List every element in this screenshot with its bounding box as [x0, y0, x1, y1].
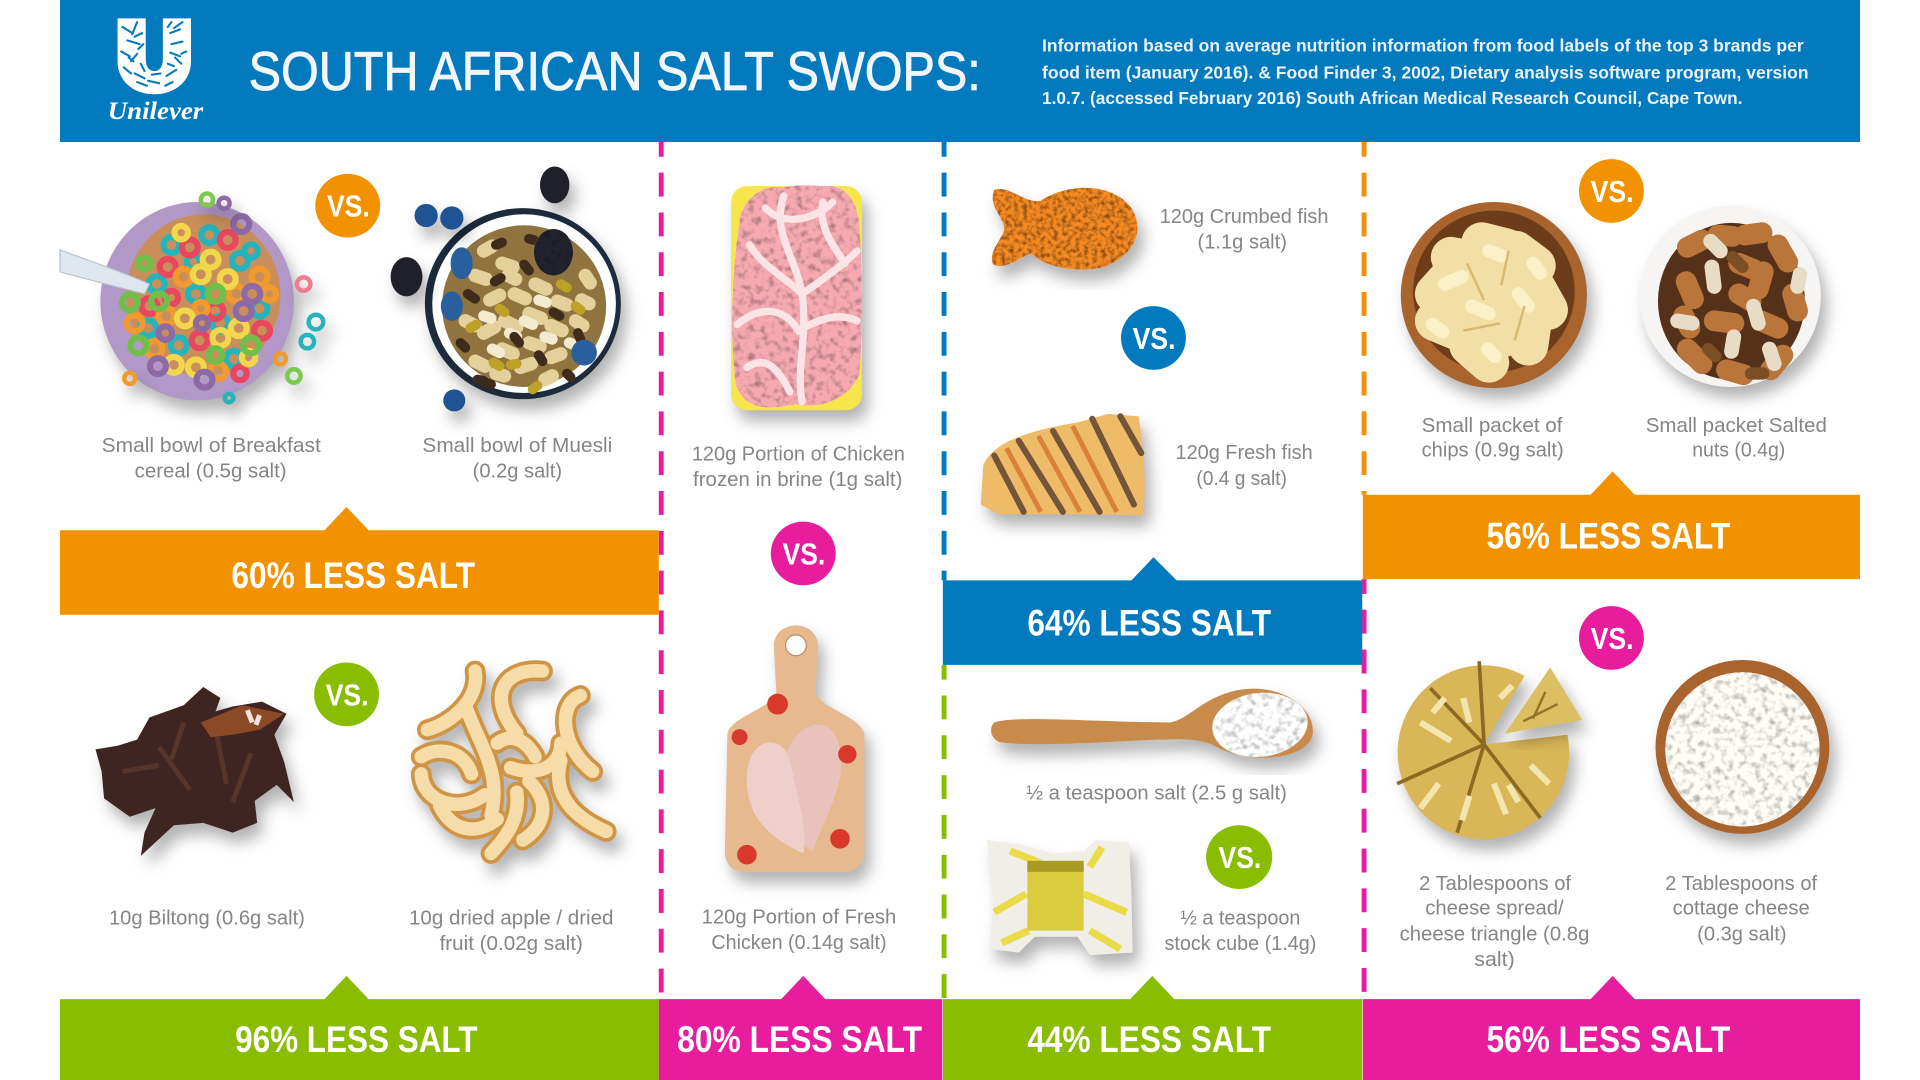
- caption: dried fruit: 10g dried apple / dried: [409, 907, 613, 929]
- caption: breakfast cereal: [102, 435, 321, 483]
- icon: grilled fish: [981, 414, 1145, 516]
- Unilever wordmark: Unilever: [108, 96, 204, 125]
- result banner: 96% less salt: 96% LESS SALT: [235, 1019, 478, 1060]
- result banner: 96% less salt: [60, 976, 659, 1080]
- vs badge: VS.: [326, 678, 369, 712]
- icon: muesli bowl with berries: [391, 167, 621, 411]
- caption: fresh fish: (0.4 g salt): [1196, 468, 1287, 490]
- caption: frozen chicken: frozen in brine (1g salt): [693, 469, 902, 491]
- icon: stock cube: [987, 840, 1133, 955]
- caption: fresh chicken: 120g Portion of Fresh: [702, 906, 896, 928]
- vs badge: [1579, 159, 1644, 223]
- title: SOUTH AFRICAN SALT SWOPS:: [249, 40, 981, 102]
- caption: crumbed fish: 120g Crumbed fish: [1160, 206, 1329, 228]
- result banner: 64% less salt: 64% LESS SALT: [1027, 603, 1271, 644]
- caption: biltong: 10g Biltong (0.6g salt): [109, 907, 305, 929]
- caption: stock cube: stock cube (1.4g): [1164, 933, 1316, 955]
- icon: cereal bowl: [60, 193, 323, 402]
- caption: muesli: (0.2g salt): [473, 461, 562, 483]
- header banner: [60, 0, 1860, 142]
- source note: [1042, 35, 1809, 108]
- caption: dried fruit: fruit (0.02g salt): [440, 933, 583, 955]
- caption: frozen chicken: 120g Portion of Chicken: [692, 443, 905, 465]
- icon: bowl of chips: [1401, 202, 1587, 388]
- caption: fresh chicken: Chicken (0.14g salt): [711, 932, 887, 954]
- panel: crumbed vs fresh fish: [943, 188, 1362, 665]
- vs badge: VS.: [782, 537, 825, 571]
- icon: crumbed fish: [992, 188, 1137, 270]
- caption: stock cube: ½ a teaspoon: [1180, 907, 1300, 929]
- icon: cheese triangles: [1397, 661, 1582, 839]
- caption: salted nuts: Small packet Salted: [1646, 415, 1827, 437]
- caption: crumbed fish: (1.1g salt): [1198, 232, 1287, 254]
- caption: salted nuts: nuts (0.4g): [1692, 440, 1785, 462]
- caption: cheese spread: 2 Tablespoons of: [1419, 873, 1571, 895]
- vs badge: [1121, 306, 1186, 370]
- caption: frozen chicken: [692, 443, 905, 491]
- vs badge: [314, 662, 379, 726]
- caption: muesli: [422, 435, 612, 483]
- result banner: 56% less salt (pink): 56% LESS SALT: [1487, 1019, 1731, 1060]
- icon: bowl of cottage cheese: [1656, 660, 1829, 834]
- icon: dried apple slices: [421, 671, 606, 853]
- source note: Information based on average nutrition information from food labels of the top 3 brands per: [1042, 35, 1804, 55]
- result banner: 56% less salt (orange): 56% LESS SALT: [1487, 516, 1731, 557]
- caption: fresh chicken: [702, 906, 896, 954]
- icon: Unilever logo: [108, 18, 204, 125]
- result banner: 56% less salt (pink): [1363, 976, 1860, 1080]
- icon: biltong: [96, 687, 294, 856]
- panel: frozen vs fresh chicken: [659, 185, 942, 1080]
- vs badge: [771, 522, 836, 585]
- caption: cheese spread: [1400, 873, 1589, 971]
- icon: fresh chicken on board: [725, 625, 864, 872]
- caption: cottage cheese: [1665, 873, 1818, 945]
- panel: breakfast cereal vs muesli: [60, 167, 659, 615]
- vs badge: [315, 174, 380, 238]
- caption: cheese spread: salt): [1474, 949, 1515, 971]
- panel: chips vs salted nuts: [1363, 159, 1860, 579]
- result banner: 44% less salt: [943, 976, 1362, 1080]
- result banner: 64% less salt: [943, 557, 1362, 665]
- panel: cheese spread vs cottage cheese: [1363, 606, 1860, 1080]
- vs badge: VS.: [1218, 841, 1261, 875]
- caption: muesli: Small bowl of Muesli: [422, 435, 612, 457]
- result banner: 56% less salt (orange): [1363, 471, 1860, 579]
- vs badge: VS.: [1133, 322, 1176, 356]
- icon: bowl of nuts: [1640, 206, 1821, 387]
- caption: fresh fish: 120g Fresh fish: [1176, 442, 1313, 464]
- vs badge: VS.: [327, 190, 370, 224]
- caption: breakfast cereal: cereal (0.5g salt): [135, 461, 287, 483]
- result banner: 60% less salt: 60% LESS SALT: [231, 555, 476, 596]
- panel: biltong vs dried fruit: [60, 662, 659, 1080]
- caption: cottage cheese: (0.3g salt): [1697, 923, 1787, 945]
- vs badge: VS.: [1591, 175, 1633, 209]
- caption: teaspoon salt: ½ a teaspoon salt (2.5 g salt): [1026, 783, 1287, 805]
- source note: 1.0.7. (accessed February 2016) South African Medical Research Council, Cape Town.: [1042, 88, 1742, 108]
- caption: fresh fish: [1176, 442, 1313, 490]
- caption: breakfast cereal: Small bowl of Breakfast: [102, 435, 321, 457]
- caption: cheese spread: cheese triangle (0.8g: [1400, 923, 1589, 945]
- caption: stock cube: [1164, 907, 1316, 955]
- vs badge: VS.: [1591, 622, 1633, 656]
- vs badge: [1579, 606, 1644, 670]
- caption: chips: [1422, 415, 1564, 462]
- panel: salt vs stock cube: [943, 688, 1362, 1080]
- caption: chips: chips (0.9g salt): [1422, 440, 1564, 462]
- source note: food item (January 2016). & Food Finder 3, 2002, Dietary analysis software program, version: [1042, 62, 1809, 82]
- caption: dried fruit: [409, 907, 613, 955]
- icon: spoon of salt: [991, 688, 1313, 762]
- caption: cottage cheese: cottage cheese: [1673, 898, 1810, 920]
- icon: frozen chicken tray: [731, 185, 862, 410]
- caption: cottage cheese: 2 Tablespoons of: [1665, 873, 1818, 895]
- result banner: 80% less salt: 80% LESS SALT: [677, 1019, 923, 1060]
- caption: chips: Small packet of: [1422, 415, 1563, 437]
- caption: salted nuts: [1646, 415, 1827, 462]
- result banner: 60% less salt: [60, 507, 659, 615]
- result banner: 44% less salt: 44% LESS SALT: [1027, 1019, 1271, 1060]
- caption: crumbed fish: [1160, 206, 1329, 254]
- vs badge: [1206, 825, 1272, 889]
- result banner: 80% less salt: [659, 976, 942, 1080]
- caption: cheese spread: cheese spread/: [1425, 898, 1564, 920]
